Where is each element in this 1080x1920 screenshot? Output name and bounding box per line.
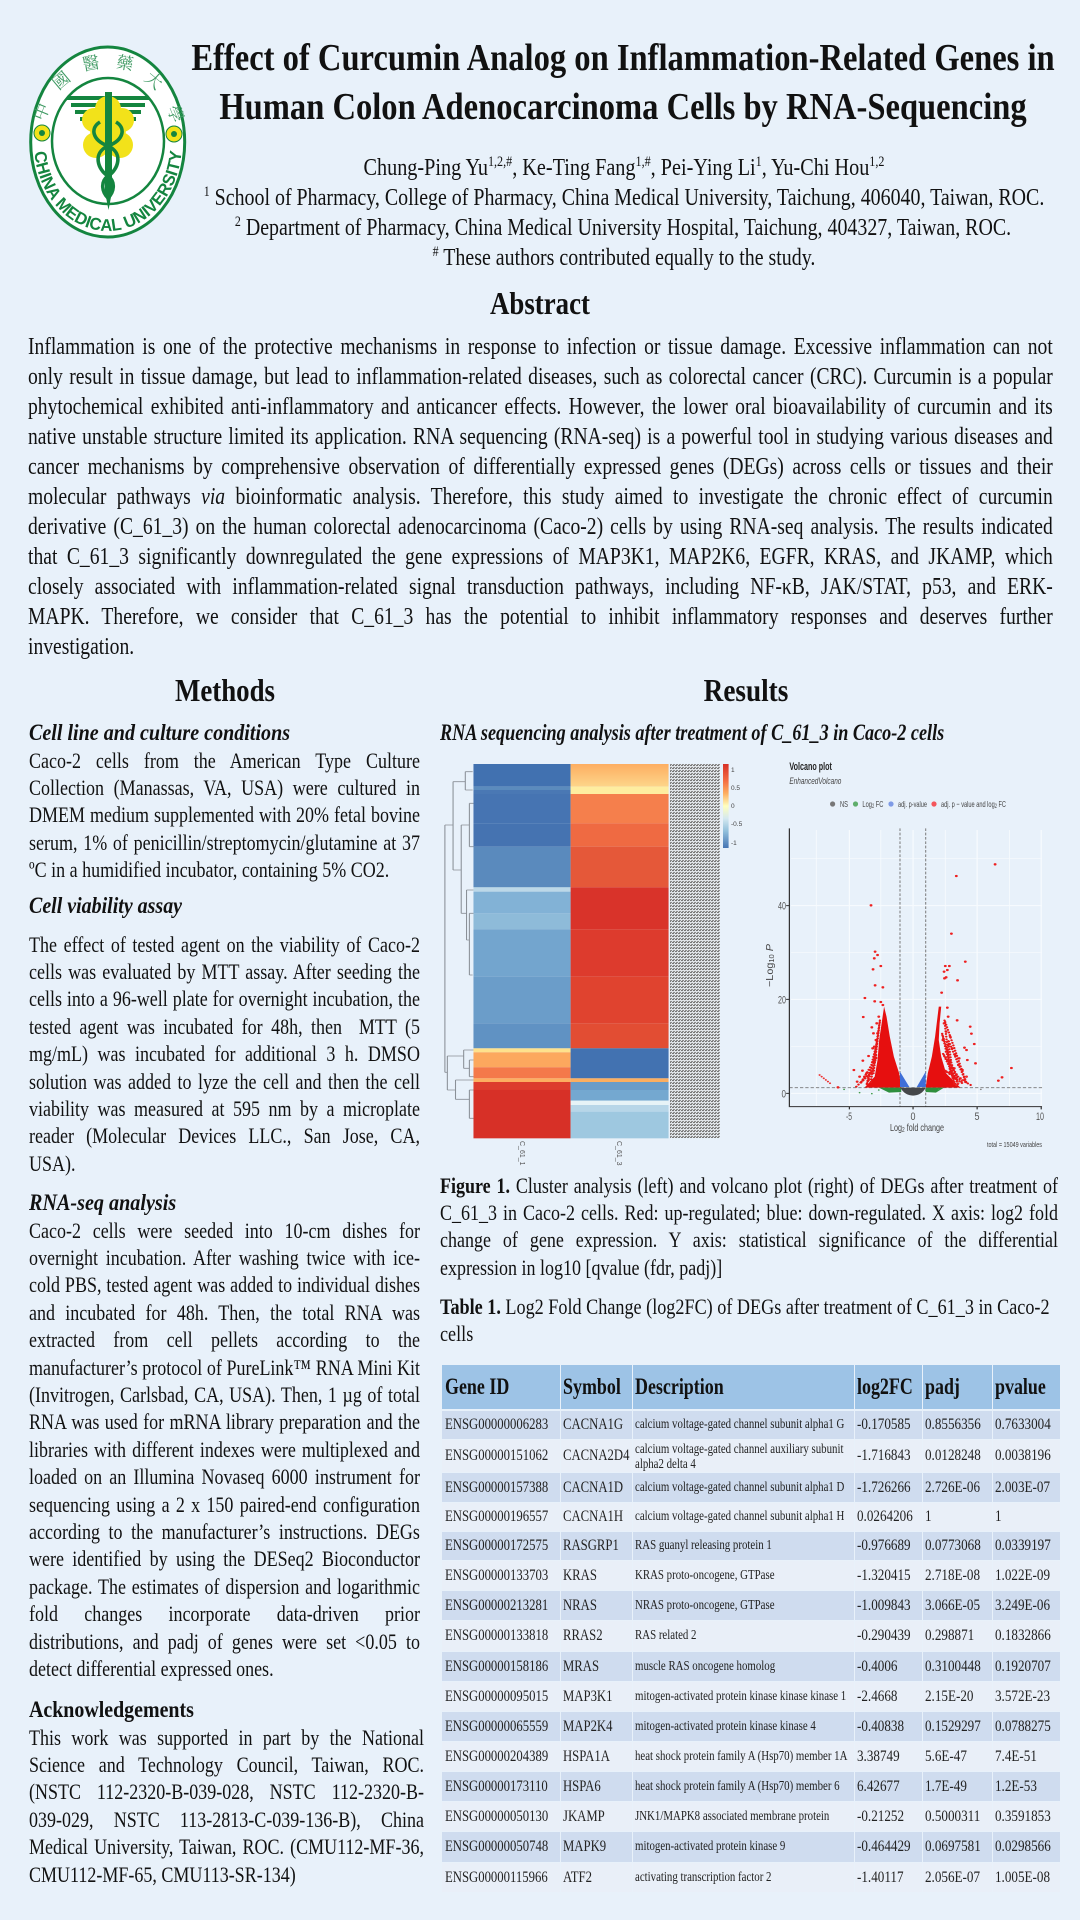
row: RASGRP1: ENSG00000172575 <box>445 1537 548 1554</box>
figure 1 caption: expression in log10 [qvalue (fdr, padj)] <box>440 1255 722 1280</box>
subheading: cell viability assay: Cell viability assay <box>28 893 182 918</box>
text: RNA-seq: sequencing using a 2 x 150 paired-end configuration <box>29 1492 420 1517</box>
text: cell viability: mg/mL) was incubated for additional 3 h. DMSO <box>29 1041 420 1066</box>
heatmap row labels <box>670 764 720 1138</box>
row: MAP2K4: 0.1529297 <box>925 1718 981 1735</box>
row: MAP3K1: -2.4668 <box>857 1688 897 1705</box>
text: RNA-seq: distributions, and padj of genes were set <0.05 to <box>29 1629 420 1654</box>
title line 2: Human Colon Adenocarcinoma Cells by RNA-Sequencing <box>219 86 1027 128</box>
subheading: cell line and culture conditions: Cell line and culture conditions <box>28 720 290 745</box>
text: RNA-seq: (Invitrogen, Carlsbad, CA, USA). Then, 1 µg of total <box>29 1382 420 1407</box>
chart: volcano plot <box>765 761 1044 1149</box>
row: CACNA1D: 2.003E-07 <box>995 1479 1050 1496</box>
row: CACNA1H: 1 <box>995 1508 1002 1525</box>
grey centre: not significant <box>900 1088 926 1096</box>
y axis labels: 10 <box>769 954 776 963</box>
row: NRAS <box>442 1591 1060 1620</box>
logo: China Medical University seal: CHINA MEDICAL UNIVERSITY <box>34 150 182 232</box>
row: MAPK9: 0.0298566 <box>995 1838 1051 1855</box>
row: RRAS2: ENSG00000133818 <box>445 1627 548 1644</box>
y axis labels: −Log <box>765 964 776 987</box>
text: RNA-seq: detect differential expressed ones. <box>29 1656 273 1681</box>
text: RNA-seq: RNA was used for mRNA library preparation and the <box>29 1409 420 1434</box>
abstract text: phytochemical exhibited anti-inflammatory and anticancer effects. However, the lower oral bioavailability of curcumin and its <box>28 393 1053 420</box>
row: CACNA1G <box>442 1411 1060 1439</box>
y axis labels: P <box>765 944 776 954</box>
row: ATF2: activating transcription factor 2 <box>635 1870 771 1885</box>
row: CACNA1D: calcium voltage-gated channel subunit alpha1 D <box>635 1480 844 1495</box>
heatmap colour scale: 0.5 <box>731 785 740 792</box>
blue wedges: adjusted p only <box>900 1072 926 1087</box>
row: MRAS: MRAS <box>563 1658 599 1675</box>
row: HSPA6: 1.2E-53 <box>995 1778 1037 1795</box>
abstract text: native unstable structure limited its application. RNA sequencing (RNA-seq) is a powerful tool in studying various diseases and <box>28 423 1053 450</box>
row: KRAS: ENSG00000133703 <box>445 1567 548 1584</box>
row: MAP2K4: MAP2K4 <box>563 1718 612 1735</box>
row: RRAS2: RAS related 2 <box>635 1628 696 1643</box>
table header: log2FC <box>857 1374 913 1399</box>
abstract text: MAPK. Therefore, we consider that C_61_3 has the potential to inhibit inflammatory responses and deserves further <box>28 603 1053 630</box>
heatmap column labels <box>518 1141 622 1166</box>
row: MAPK9: mitogen-activated protein kinase 9 <box>635 1839 785 1854</box>
row: MRAS: -0.4006 <box>857 1658 897 1675</box>
row: HSPA1A: heat shock protein family A (Hsp70) member 1A <box>635 1749 847 1764</box>
text: acknowledgements: Medical University, Taiwan, ROC. (CMU112-MF-36, <box>29 1834 424 1859</box>
table 1 caption: cells <box>440 1321 473 1346</box>
row: ATF2: -1.40117 <box>857 1869 904 1886</box>
text: RNA-seq: manufacturer’s protocol of PureLink™ RNA Mini Kit <box>29 1355 420 1380</box>
text: cell viability: viability was measured at 595 nm by a microplate <box>29 1096 420 1121</box>
plot subtitle: EnhancedVolcano <box>789 776 841 786</box>
row: ATF2: ATF2 <box>563 1869 592 1886</box>
row: NRAS: ENSG00000213281 <box>445 1597 548 1614</box>
plot title: Volcano plot <box>789 761 832 773</box>
table header: Description <box>635 1374 724 1399</box>
abstract text: investigation. <box>28 633 134 660</box>
row: CACNA1G: calcium voltage-gated channel subunit alpha1 G <box>635 1417 844 1432</box>
row: JKAMP: 0.5000311 <box>925 1808 980 1825</box>
row: JKAMP: ENSG00000050130 <box>445 1808 548 1825</box>
row: MAP3K1: mitogen-activated protein kinase kinase kinase 1 <box>635 1689 846 1704</box>
row: HSPA6: 6.42677 <box>857 1778 900 1795</box>
text: cell viability: cells into a 96-well plate for overnight incubation, the <box>29 986 420 1011</box>
table header: padj <box>925 1374 960 1399</box>
row: MRAS <box>442 1652 1060 1681</box>
text: RNA-seq: cold PBS, tested agent was added to individual dishes <box>29 1272 420 1297</box>
row: MAP3K1: ENSG00000095015 <box>445 1688 548 1705</box>
text: cell line: DMEM medium supplemented with 20% fetal bovine <box>29 802 420 827</box>
heatmap column labels: C_61_1 <box>518 1141 525 1166</box>
row: HSPA1A: 5.6E-47 <box>925 1748 967 1765</box>
row: HSPA6: ENSG00000173110 <box>445 1778 548 1795</box>
row: CACNA2D4: 0.0128248 <box>925 1447 981 1464</box>
row: NRAS: 3.066E-05 <box>925 1597 980 1614</box>
legend: Log <box>862 799 877 809</box>
row: RRAS2: 0.298871 <box>925 1627 974 1644</box>
text: cell line: serum, 1% of penicillin/streptomycin/glutamine at 37 <box>29 830 420 855</box>
row: HSPA6: HSPA6 <box>563 1778 601 1795</box>
row: MRAS: ENSG00000158186 <box>445 1658 548 1675</box>
figure 1 caption: Figure 1. Cluster analysis (left) and volcano plot (right) of DEGs after treatment of <box>440 1173 1058 1198</box>
text: RNA-seq: according to the manufacturer’s instructions. DEGs <box>29 1519 420 1544</box>
row: CACNA1G: CACNA1G <box>563 1416 623 1433</box>
chart: heatmap cluster analysis <box>444 764 743 1166</box>
table header: pvalue <box>995 1374 1046 1399</box>
table 1: differentially expressed genes <box>442 1365 1060 1886</box>
scattered red points <box>838 864 1011 1087</box>
row: RASGRP1: RAS guanyl releasing protein 1 <box>635 1538 772 1553</box>
legend: adj. p − value and log <box>941 799 1022 809</box>
abstract text: molecular pathways via bioinformatic analysis. Therefore, this study aimed to investigate the chronic effect of curcumin <box>28 483 1053 510</box>
row: MAP3K1: 3.572E-23 <box>995 1688 1050 1705</box>
row: MAPK9: MAPK9 <box>563 1838 606 1855</box>
row: JKAMP: 0.3591853 <box>995 1808 1051 1825</box>
row: MAP2K4 <box>442 1712 1060 1741</box>
row: JKAMP: -0.21252 <box>857 1808 904 1825</box>
y axis labels <box>765 900 786 1100</box>
text: cell viability: USA). <box>29 1151 75 1176</box>
row: MAP2K4: -0.40838 <box>857 1718 904 1735</box>
row: MAP2K4: ENSG00000065559 <box>445 1718 548 1735</box>
row: NRAS: 3.249E-06 <box>995 1597 1050 1614</box>
heatmap column 1 <box>473 764 571 1138</box>
row: HSPA1A <box>442 1742 1060 1771</box>
text: RNA-seq: were identified by using the DESeq2 Bioconductor <box>29 1546 420 1571</box>
x axis labels: 2 <box>902 1127 905 1134</box>
text: RNA-seq: extracted from cell pellets according to the <box>29 1327 420 1352</box>
equal contribution note: # These authors contributed equally to the study. <box>433 244 815 271</box>
row: MAP2K4: mitogen-activated protein kinase kinase 4 <box>635 1719 816 1734</box>
text: RNA-seq: and incubated for 48h. Then, the total RNA was <box>29 1300 420 1325</box>
row: JKAMP: JNK1/MAPK8 associated membrane protein <box>635 1809 829 1824</box>
row: NRAS: NRAS proto-oncogene, GTPase <box>635 1598 775 1613</box>
legend: NS <box>840 799 848 809</box>
text: RNA-seq: overnight incubation. After washing twice with ice- <box>29 1245 420 1270</box>
logo: China Medical University seal: 醫 <box>80 48 101 75</box>
x axis labels: -5 <box>846 1111 852 1123</box>
abstract text: Inflammation is one of the protective mechanisms in response to infection or tissue damage. Excessive inflammation can not <box>28 333 1053 360</box>
legend: 2 <box>995 804 997 810</box>
row: RASGRP1: -0.976689 <box>857 1537 911 1554</box>
text: cell line: Caco-2 cells from the American Type Culture <box>29 748 420 773</box>
row: KRAS: 1.022E-09 <box>995 1567 1050 1584</box>
significance thresholds <box>789 828 1042 1107</box>
row: CACNA1D: ENSG00000157388 <box>445 1479 548 1496</box>
row: MRAS: 0.3100448 <box>925 1658 981 1675</box>
logo: China Medical University seal: 藥 <box>115 48 136 75</box>
figure 1 caption: C_61_3 in Caco-2 cells. Red: up-regulated; blue: down-regulated. X axis: log2 fold <box>440 1200 1058 1225</box>
row: HSPA1A: 3.38749 <box>857 1748 900 1765</box>
logo: China Medical University seal: 中 <box>25 99 55 124</box>
row: CACNA2D4: 0.0038196 <box>995 1447 1051 1464</box>
table 1 caption <box>440 1294 1050 1346</box>
streak of red points <box>820 1075 967 1085</box>
row: CACNA1H <box>442 1503 1060 1531</box>
text: acknowledgements: (NSTC 112-2320-B-039-028, NSTC 112-2320-B- <box>29 1779 424 1804</box>
row: CACNA1H: calcium voltage-gated channel subunit alpha1 H <box>635 1509 844 1524</box>
text: RNA-seq: libraries with different indexes were multiplexed and <box>29 1437 420 1462</box>
text: cell viability: The effect of tested agent on the viability of Caco-2 <box>29 932 420 957</box>
logo: China Medical University seal: 國 <box>46 64 75 94</box>
text: cell viability: cells was evaluated by MTT assay. After seeding the <box>29 959 420 984</box>
row: ATF2: ENSG00000115966 <box>445 1869 548 1886</box>
row: JKAMP <box>442 1802 1060 1831</box>
text: acknowledgements <box>29 1725 424 1887</box>
row: CACNA2D4: ENSG00000151062 <box>445 1447 548 1464</box>
x axis labels: 10 <box>1036 1111 1044 1123</box>
heatmap column labels: C_61_3 <box>615 1141 622 1166</box>
table header <box>442 1365 1060 1409</box>
text: cell line: ºC in a humidified incubator, containing 5% CO2. <box>29 857 389 882</box>
row: KRAS: -1.320415 <box>857 1567 911 1584</box>
row: CACNA1H: 1 <box>925 1508 932 1525</box>
title: Effect of Curcumin Analog on Inflammation-Related Genes in <box>191 37 1055 79</box>
abstract text: that C_61_3 significantly downregulated the gene expressions of MAP3K1, MAP2K6, EGFR, KRAS, and JKAMP, which <box>28 543 1053 570</box>
abstract text: derivative (C_61_3) on the human colorectal adenocarcinoma (Caco-2) cells by using RNA-seq analysis. The results indicated <box>28 513 1053 540</box>
affiliation 1: 1 School of Pharmacy, College of Pharmacy, China Medical University, Taichung, 406040, Taiwan, ROC. <box>204 184 1044 211</box>
logo: China Medical University seal <box>25 46 191 238</box>
legend: FC <box>874 799 883 809</box>
row: MAP3K1 <box>442 1682 1060 1711</box>
row: CACNA1G: -0.170585 <box>857 1416 911 1433</box>
y axis labels: 20 <box>778 994 786 1006</box>
text: RNA-seq: Caco-2 cells were seeded into 10-cm dishes for <box>29 1218 420 1243</box>
text: RNA-seq: package. The estimates of dispersion and logarithmic <box>29 1574 420 1599</box>
row: RRAS2: RRAS2 <box>563 1627 603 1644</box>
text: cell line <box>29 748 420 882</box>
y axis labels: 40 <box>778 900 786 912</box>
x axis labels: 0 <box>910 1111 916 1123</box>
text: cell viability: solution was added to lyze the cell and then the cell <box>29 1069 420 1094</box>
abstract text: only result in tissue damage, but lead to inflammation-related diseases, such as colorectal cancer (CRC). Curcumin is a popular <box>28 363 1053 390</box>
row: MAPK9 <box>442 1832 1060 1862</box>
subheading: RNA sequencing analysis: RNA sequencing analysis after treatment of C_61_3 in Caco-2 cells <box>440 720 944 745</box>
x axis labels: 5 <box>974 1111 980 1123</box>
row: NRAS: NRAS <box>563 1597 597 1614</box>
heatmap colour scale: -0.5 <box>731 821 743 828</box>
row: CACNA1D: 2.726E-06 <box>925 1479 980 1496</box>
heatmap colour scale: -1 <box>731 840 737 847</box>
row: CACNA1H: 0.0264206 <box>857 1508 913 1525</box>
row: MAP3K1: 2.15E-20 <box>925 1688 973 1705</box>
row: HSPA6: heat shock protein family A (Hsp70) member 6 <box>635 1779 840 1794</box>
row: RASGRP1: 0.0773068 <box>925 1537 981 1554</box>
row: MRAS: muscle RAS oncogene homolog <box>635 1659 775 1674</box>
row: KRAS: KRAS proto-oncogene, GTPase <box>635 1568 775 1583</box>
logo: China Medical University seal: 學 <box>162 101 191 126</box>
axes <box>786 828 1042 1109</box>
text: acknowledgements: Science and Technology Council, Taiwan, ROC. <box>29 1752 424 1777</box>
text: cell viability <box>29 932 420 1176</box>
row: ATF2 <box>442 1863 1060 1892</box>
row: NRAS: -1.009843 <box>857 1597 911 1614</box>
row: HSPA1A: ENSG00000204389 <box>445 1748 548 1765</box>
affiliation 2: 2 Department of Pharmacy, China Medical University Hospital, Taichung, 404327, Taiwan, ROC. <box>235 214 1011 241</box>
row: RASGRP1: 0.0339197 <box>995 1537 1051 1554</box>
row: CACNA1D <box>442 1473 1060 1502</box>
row: CACNA1H: ENSG00000196557 <box>445 1508 548 1525</box>
text: cell line: Collection (Manassas, VA, USA) were cultured in <box>29 775 420 800</box>
row: MAP3K1: MAP3K1 <box>563 1688 612 1705</box>
row: KRAS <box>442 1561 1060 1590</box>
legend <box>830 799 1006 810</box>
row: CACNA1G: 0.7633004 <box>995 1416 1051 1433</box>
row: RASGRP1 <box>442 1532 1060 1560</box>
abstract text <box>28 333 1053 660</box>
text: acknowledgements: 039-029, NSTC 113-2813-C-039-136-B), China <box>29 1807 424 1832</box>
row: ATF2: 1.005E-08 <box>995 1869 1050 1886</box>
text: cell viability: reader (Molecular Devices LLC., San Jose, CA, <box>29 1123 420 1148</box>
legend: 2 <box>872 804 875 810</box>
heatmap colour scale: 1 <box>731 767 735 774</box>
green bands: fold change only <box>879 1088 944 1093</box>
row: CACNA1G: ENSG00000006283 <box>445 1416 548 1433</box>
text: RNA-seq: loaded on an Illumina Novaseq 6000 instrument for <box>29 1464 420 1489</box>
x axis labels: fold change <box>905 1122 944 1134</box>
red wedges: significant genes <box>864 1007 901 1088</box>
subheading: RNA-seq analysis: RNA-seq analysis <box>28 1190 176 1215</box>
heading: Abstract: Abstract <box>490 285 590 321</box>
heading: Results: Results <box>704 672 788 708</box>
row: MAPK9: 0.0697581 <box>925 1838 981 1855</box>
row: JKAMP: JKAMP <box>563 1808 605 1825</box>
scattered green and grey points <box>844 1089 939 1094</box>
row: KRAS: KRAS <box>563 1567 597 1584</box>
row: CACNA2D4: alpha2 delta 4 <box>635 1457 696 1472</box>
logo: China Medical University seal: 大 <box>140 64 169 94</box>
row: KRAS: 2.718E-08 <box>925 1567 980 1584</box>
row: HSPA6 <box>442 1772 1060 1801</box>
x axis labels <box>846 1111 1044 1134</box>
dense scatter of red points <box>856 1020 971 1087</box>
row: CACNA1G: 0.8556356 <box>925 1416 981 1433</box>
text: acknowledgements: CMU112-MF-65, CMU113-SR-134) <box>29 1862 295 1887</box>
row: CACNA2D4: CACNA2D4 <box>563 1447 629 1464</box>
abstract text: closely associated with inflammation-related signal transduction pathways, including NF-κB, JAK/STAT, p53, and ERK- <box>28 573 1053 600</box>
x axis labels: Log <box>890 1122 908 1134</box>
figure 1 caption: change of gene expression. Y axis: statistical significance of the differential <box>440 1227 1058 1252</box>
legend: adj. p-value <box>898 799 927 809</box>
heading: Methods: Methods <box>175 672 275 708</box>
row: MRAS: 0.1920707 <box>995 1658 1051 1675</box>
heatmap column 2 <box>571 764 669 1138</box>
table 1 caption: Table 1. Log2 Fold Change (log2FC) of DEGs after treatment of C_61_3 in Caco-2 <box>440 1294 1050 1319</box>
heatmap colour scale <box>723 764 743 848</box>
row: RRAS2: -0.290439 <box>857 1627 911 1644</box>
row: CACNA1H: CACNA1H <box>563 1508 623 1525</box>
heading: Acknowledgements: Acknowledgements <box>28 1697 193 1722</box>
abstract text: cancer mechanisms by comprehensive observation of differentially expressed genes (DEGs) across cells or tissues and their <box>28 453 1053 480</box>
text: cell viability: tested agent was incubated for 48h, then MTT (5 <box>29 1014 420 1039</box>
text: RNA-seq: fold changes incorporate data-driven prior <box>29 1601 420 1626</box>
table header: Symbol <box>563 1374 621 1399</box>
y axis labels: 0 <box>782 1088 786 1100</box>
row: CACNA2D4: calcium voltage-gated channel auxiliary subunit <box>635 1442 843 1457</box>
row: CACNA2D4: -1.716843 <box>857 1447 911 1464</box>
dendrogram <box>445 772 473 1118</box>
row: CACNA2D4 <box>442 1440 1060 1472</box>
row: HSPA1A: 7.4E-51 <box>995 1748 1037 1765</box>
row: HSPA6: 1.7E-49 <box>925 1778 967 1795</box>
table header: Gene ID <box>445 1374 509 1399</box>
legend: FC <box>997 799 1006 809</box>
heatmap colour scale: 0 <box>731 803 735 810</box>
text: acknowledgements: This work was supported in part by the National <box>29 1725 424 1750</box>
authors: Chung-Ping Yu1,2,#, Ke-Ting Fang1,#, Pei-Ying Li1, Yu-Chi Hou1,2 <box>364 154 884 181</box>
row: RRAS2: 0.1832866 <box>995 1627 1051 1644</box>
row: HSPA1A: HSPA1A <box>563 1748 610 1765</box>
row: CACNA1D: -1.726266 <box>857 1479 911 1496</box>
row: MAPK9: -0.464429 <box>857 1838 911 1855</box>
text: RNA-seq <box>29 1218 420 1681</box>
figure 1 caption <box>440 1173 1058 1280</box>
row: MAPK9: ENSG00000050748 <box>445 1838 548 1855</box>
row: ATF2: 2.056E-07 <box>925 1869 980 1886</box>
row: RRAS2 <box>442 1621 1060 1651</box>
row: RASGRP1: RASGRP1 <box>563 1537 619 1554</box>
row: MAP2K4: 0.0788275 <box>995 1718 1051 1735</box>
row: CACNA1D: CACNA1D <box>563 1479 623 1496</box>
